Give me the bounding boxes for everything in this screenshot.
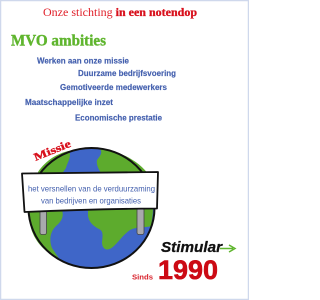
ambition list [25, 56, 176, 122]
land lower right [88, 208, 153, 249]
label: Missie: Missie [32, 138, 73, 164]
ambition 4: Maatschappelijke inzet [25, 98, 113, 107]
ambition 5: Economische prestatie [75, 114, 163, 122]
mission text [28, 184, 155, 206]
ambition 2: Duurzame bedrijfsvoering [78, 69, 176, 78]
icon: banner posts [40, 208, 144, 234]
land lower left [29, 210, 63, 260]
title: Onze stichting in een notendop [43, 7, 197, 19]
ambition 3: Gemotiveerde medewerkers [60, 83, 168, 92]
icon: arrow [220, 245, 235, 252]
heading: MVO ambities: MVO ambities [11, 32, 106, 50]
land top left [38, 151, 70, 177]
land top right [97, 149, 150, 176]
label: Sinds: Sinds [132, 272, 153, 282]
icon: globe [28, 148, 154, 268]
year: 1990: 1990 [158, 255, 218, 285]
logo: Stimular: Stimular [161, 239, 223, 256]
mission text: van bedrijven en organisaties [41, 196, 141, 206]
mission text: het versnellen van de verduurzaming [28, 184, 155, 194]
banner [22, 172, 158, 212]
ambition 1: Werken aan onze missie [37, 56, 130, 66]
